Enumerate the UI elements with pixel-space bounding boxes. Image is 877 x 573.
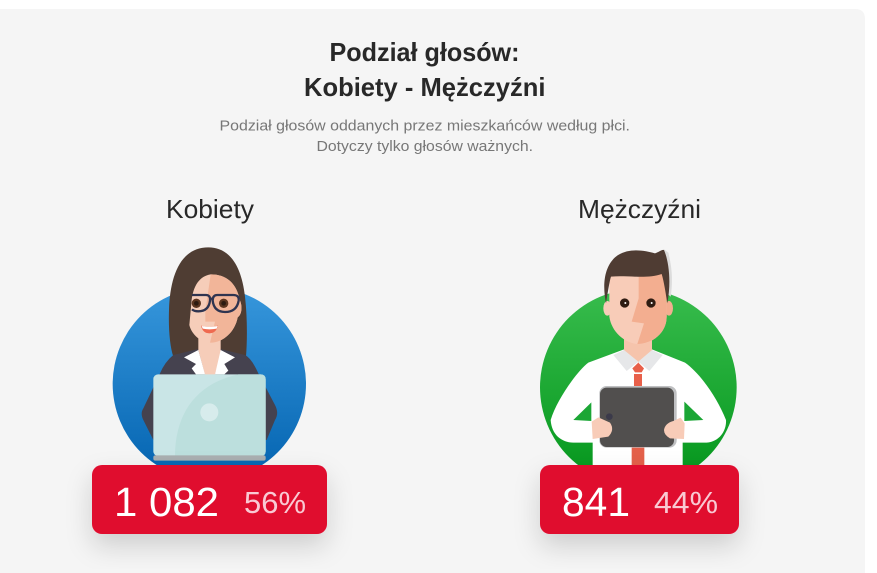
badge: Mężczyźni result (540, 465, 739, 534)
badge: Kobiety result: 1 082 (114, 479, 219, 525)
badge: Kobiety result: 56% (244, 485, 306, 520)
badge: Mężczyźni result: 44% (654, 485, 718, 520)
heading: Kobiety: Kobiety (166, 194, 254, 224)
icon: woman with laptop (113, 247, 306, 481)
badge: Mężczyźni result: 841 (562, 479, 630, 525)
subtitle: Dotyczy tylko głosów ważnych. (316, 139, 533, 155)
heading: Mężczyźni: Mężczyźni (578, 194, 701, 224)
title (304, 37, 546, 102)
icon: man with tablet (540, 249, 737, 486)
title: Podział głosów: (330, 37, 520, 67)
badge: Kobiety result (92, 465, 327, 534)
subtitle: Podział głosów oddanych przez mieszkańców według płci. (220, 118, 630, 134)
title: Kobiety - Mężczyźni (304, 72, 546, 102)
subtitle (220, 118, 630, 155)
